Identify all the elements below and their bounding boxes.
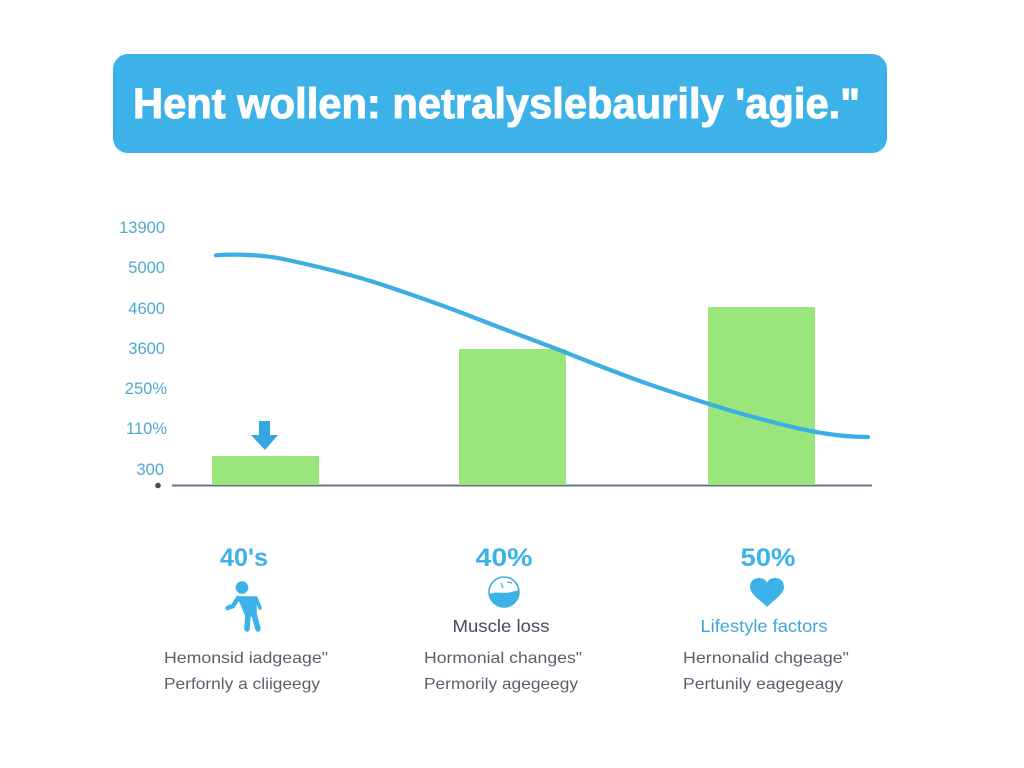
column: lifestyle factors [683,544,849,693]
y-axis labels: 250% [125,380,167,398]
trend curve [216,255,868,437]
value: 40's [220,544,268,572]
y-axis labels: 4600 [128,300,165,318]
description [164,650,328,693]
y-axis labels: 300 [136,461,164,479]
description: Hormonial changes" [424,650,582,667]
value: 50% [740,544,796,572]
y-axis labels: 110% [126,420,167,438]
description: Perfornly a cliigeegy [164,676,320,693]
description [424,650,582,693]
description: Hernonalid chgeage" [683,650,849,667]
bars [212,307,815,485]
title: Hent wollen: netralyslebaurily 'agie." [133,80,860,128]
description: Pertunily eagegeagy [683,676,843,693]
description: Hemonsid iadgeage" [164,650,328,667]
column: 40's [164,544,328,693]
axis line [155,483,872,488]
label: Muscle loss [452,616,550,636]
description: Permorily agegeegy [424,676,578,693]
icon: person [228,581,260,629]
y-axis labels [119,219,167,479]
y-axis labels: 13900 [119,219,165,237]
icon: down arrow [251,421,278,450]
title banner [113,54,887,153]
icon: gauge [489,577,519,607]
icon: heart [750,578,784,607]
column: muscle loss [424,544,582,693]
description [683,650,849,693]
label: Lifestyle factors [700,616,828,636]
value: 40% [476,544,532,572]
y-axis labels: 3600 [128,340,165,358]
y-axis labels: 5000 [128,259,165,277]
chart [119,219,872,488]
